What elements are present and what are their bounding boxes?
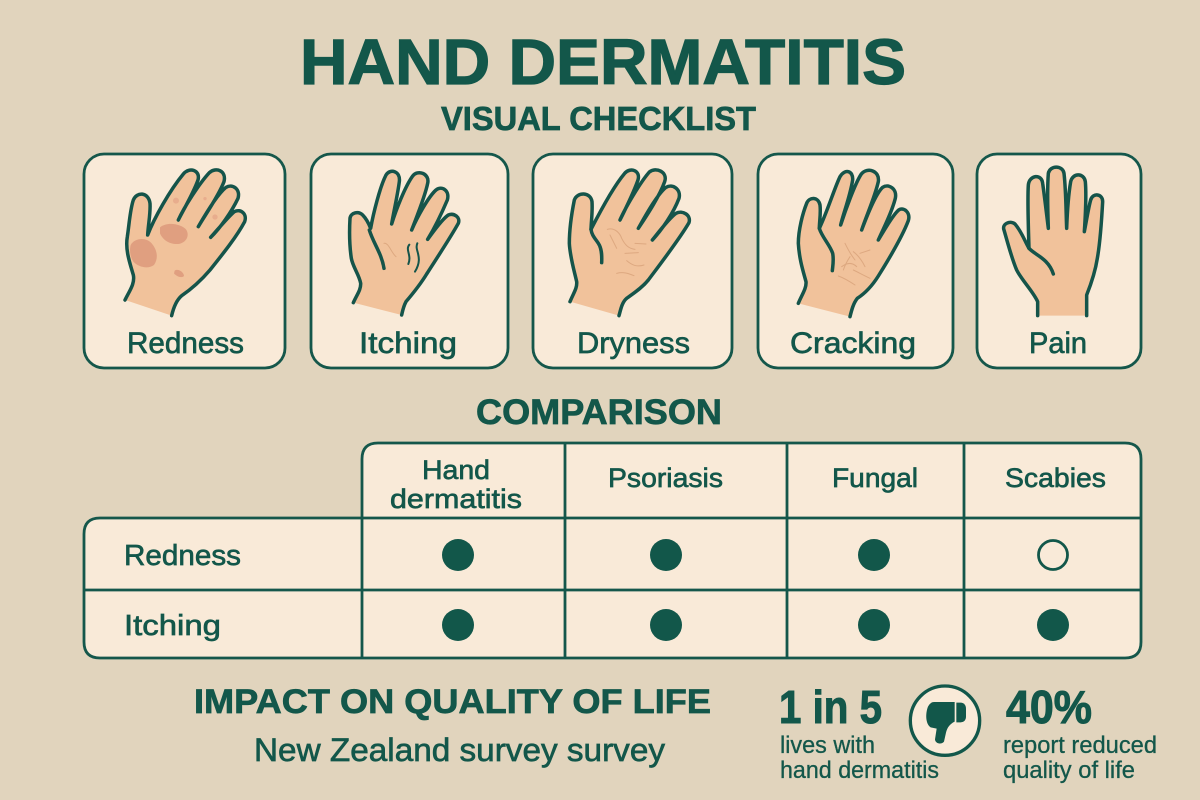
icon: hand with skin cracks <box>798 170 909 317</box>
row: itching <box>124 609 1069 642</box>
title: HAND DERMATITIS <box>300 26 906 98</box>
heading: comparison: COMPARISON <box>476 393 722 432</box>
icon: hand with itch marks <box>350 171 459 315</box>
subtitle: VISUAL CHECKLIST <box>441 100 756 137</box>
label: dryness: Dryness <box>577 327 690 360</box>
row: redness: Redness <box>124 540 241 572</box>
column headers: dermatitis <box>390 484 522 514</box>
stat: 40%: quality of life <box>1003 757 1135 784</box>
icon: thumbs down <box>910 686 980 755</box>
comparison table <box>84 443 1141 658</box>
stat: 1 in 5: 1 in 5 <box>779 681 882 733</box>
stat: 40%: report reduced <box>1003 732 1157 759</box>
panel: itching <box>311 154 508 368</box>
icon: hand with dry skin lines <box>569 170 689 316</box>
stat: 1 in 5: lives with <box>780 732 875 759</box>
label: redness: Redness <box>127 327 244 360</box>
stat: 40% <box>1003 681 1157 784</box>
subheading: survey: New Zealand survey survey <box>254 732 665 768</box>
panel: dryness <box>533 154 732 368</box>
column headers: Hand <box>422 455 490 485</box>
column headers: Scabies <box>1005 463 1106 493</box>
label: cracking: Cracking <box>790 327 916 360</box>
row: itching: Itching <box>124 610 221 642</box>
icon: hand with red patches <box>125 170 245 316</box>
panel: redness <box>84 154 285 368</box>
label: itching: Itching <box>359 327 457 360</box>
column headers: Psoriasis <box>608 463 723 493</box>
label: pain: Pain <box>1029 327 1087 360</box>
panel: cracking <box>758 154 953 368</box>
row: redness <box>124 539 1068 572</box>
stat: 1 in 5 <box>779 681 939 784</box>
heading: impact on quality of life: IMPACT ON QUALITY OF LIFE <box>194 683 711 721</box>
column headers: Fungal <box>832 463 918 493</box>
icon: open hand <box>1004 167 1103 316</box>
panel: pain <box>977 154 1141 368</box>
column headers <box>390 455 1106 514</box>
stat: 40%: 40% <box>1006 681 1092 733</box>
stat: 1 in 5: hand dermatitis <box>780 757 939 784</box>
